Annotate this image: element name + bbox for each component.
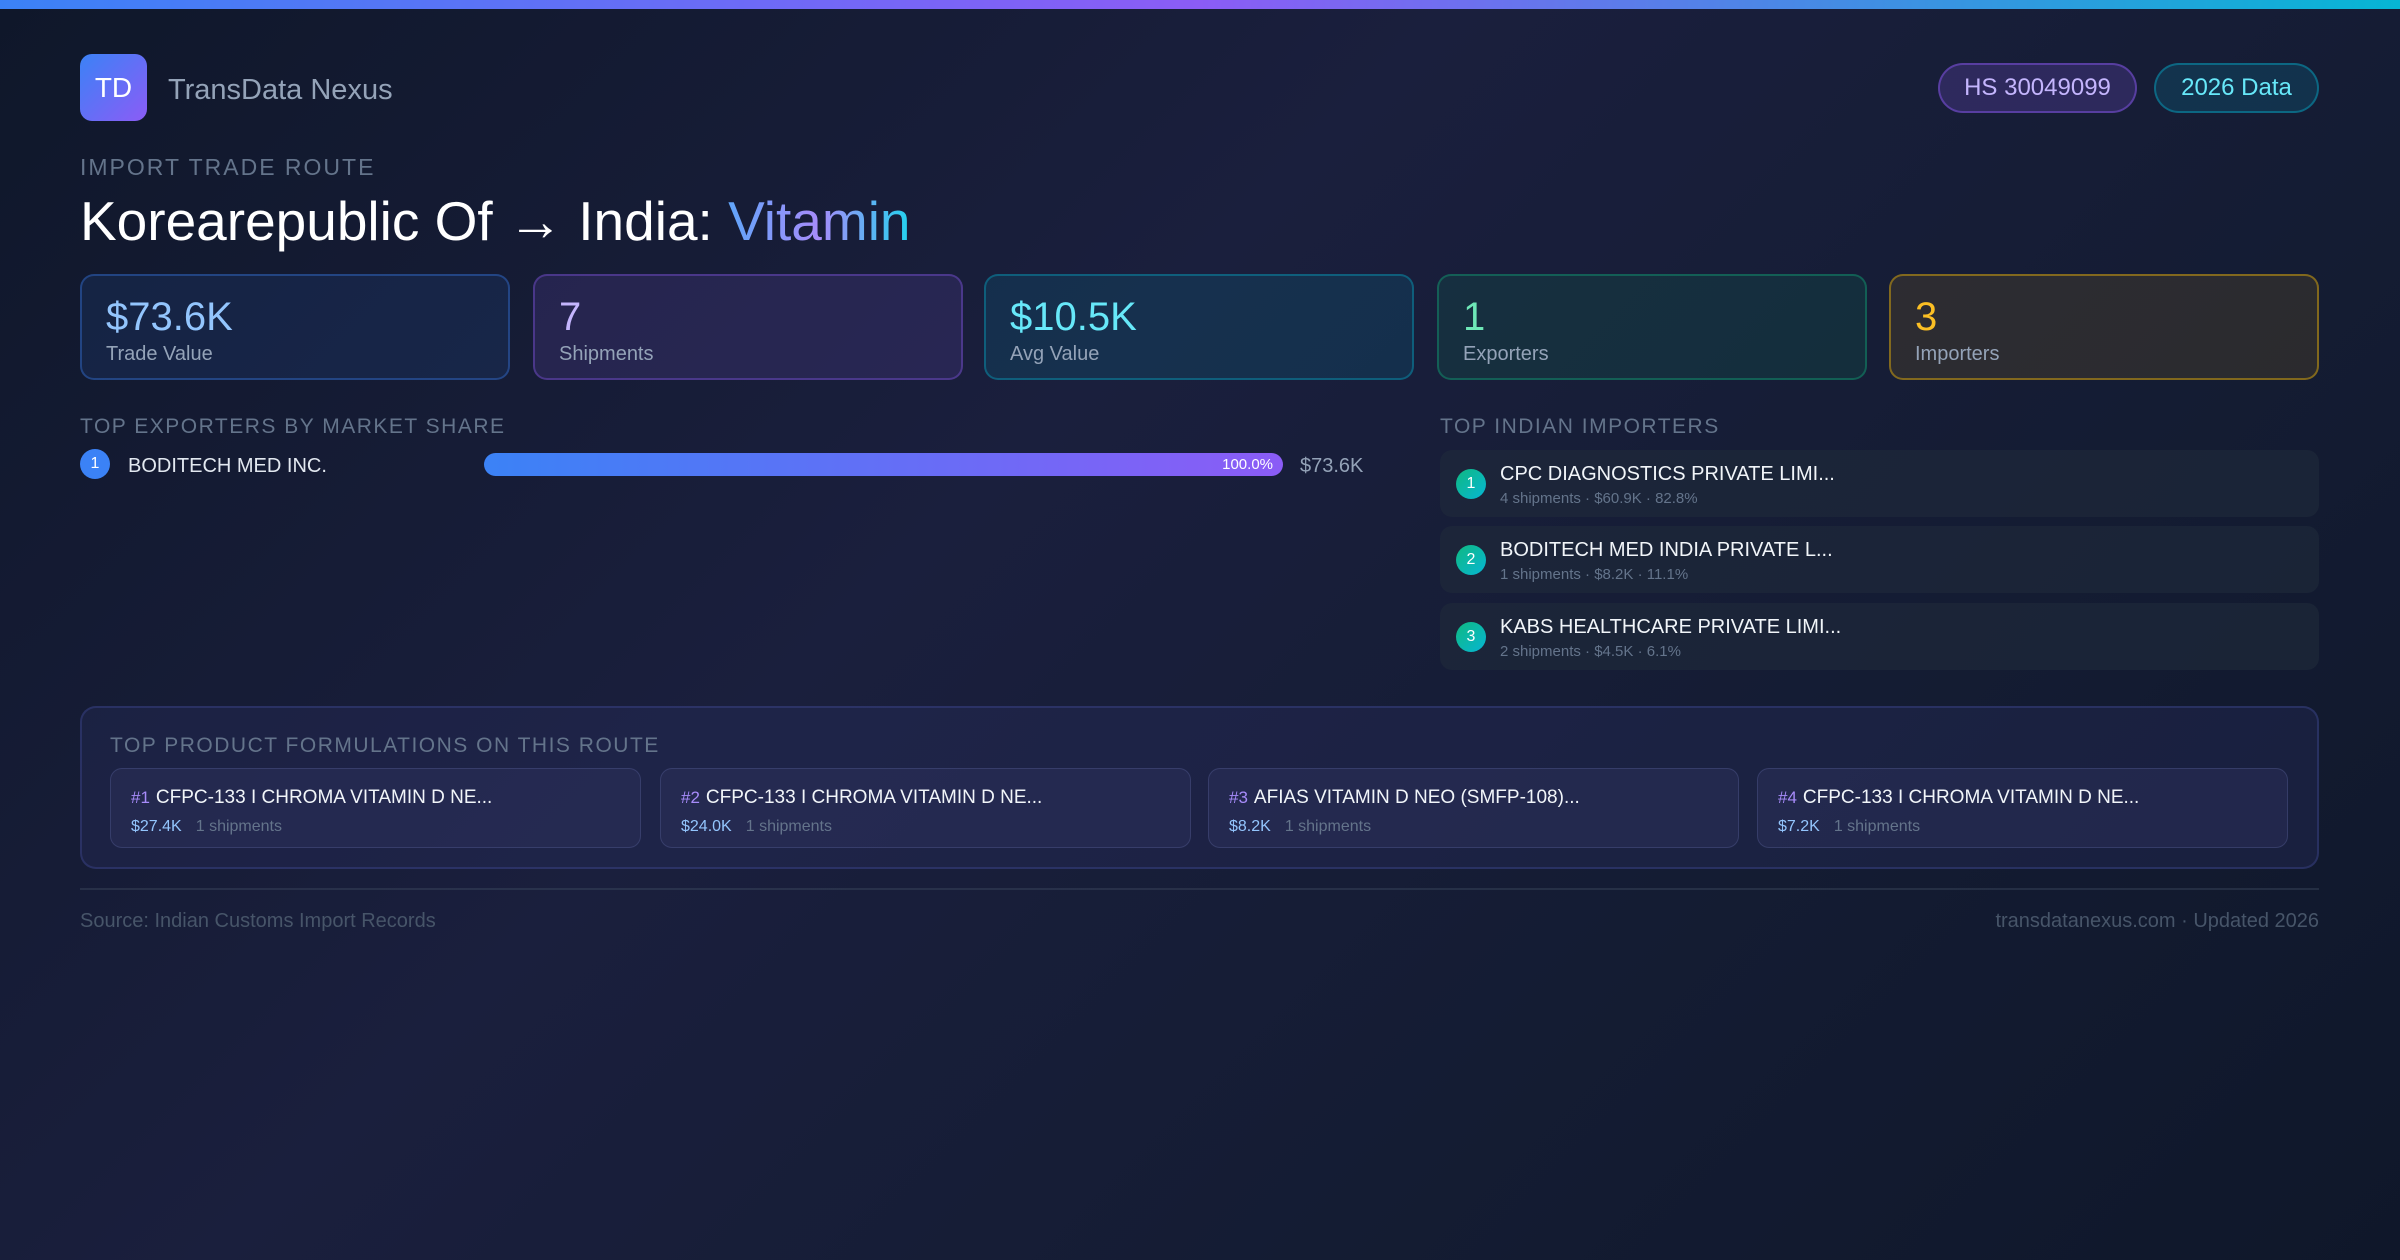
importer 1: 1 (1467, 475, 1475, 492)
exporter row: BODITECH MED INC. (128, 455, 327, 477)
bar: 100.0% (1222, 456, 1273, 473)
formulation 3: $8.2K 1 shipments (1229, 818, 1371, 835)
badge: year (2154, 63, 2319, 113)
stat card: trade value (80, 274, 510, 380)
stat card: avg value (984, 274, 1414, 380)
badge: HS code: HS 30049099 (1964, 74, 2111, 101)
formulation 1: $27.4K 1 shipments (131, 818, 282, 835)
kicker: IMPORT TRADE ROUTE (80, 154, 375, 180)
footer credit: transdatanexus.com · Updated 2026 (1995, 910, 2319, 932)
exporter row: $73.6K (1300, 455, 1363, 477)
formulation 2: #2 CFPC-133 I CHROMA VITAMIN D NE... (681, 787, 1042, 808)
stat card: shipments: 7 (559, 295, 581, 339)
importer 2: 2 (1467, 551, 1475, 568)
importer 2 (1440, 526, 2319, 593)
stat card: trade value: Trade Value (106, 343, 213, 365)
exporter row: 1 (91, 455, 99, 472)
importer 1: CPC DIAGNOSTICS PRIVATE LIMI... (1500, 463, 1835, 485)
exporter row (80, 449, 1363, 479)
importer 1: 4 shipments · $60.9K · 82.8% (1500, 490, 1698, 507)
formulation 1: #1 CFPC-133 I CHROMA VITAMIN D NE... (131, 787, 492, 808)
importer 3: KABS HEALTHCARE PRIVATE LIMI... (1500, 616, 1841, 638)
panel: formulations (80, 706, 2319, 869)
formulation 3 (1208, 768, 1739, 848)
stat card: trade value: $73.6K (106, 295, 233, 339)
logo icon: TD (95, 72, 132, 102)
logo icon (80, 54, 147, 121)
importer 3 (1440, 603, 2319, 670)
stat card: avg value: $10.5K (1010, 295, 1137, 339)
stat card: exporters: 1 (1463, 295, 1485, 339)
badge: HS code (1938, 63, 2137, 113)
importer 2: BODITECH MED INDIA PRIVATE L... (1500, 539, 1833, 561)
formulation 4: $7.2K 1 shipments (1778, 818, 1920, 835)
stat card: importers (1889, 274, 2319, 380)
formulation 2 (660, 768, 1191, 848)
stat card: avg value: Avg Value (1010, 343, 1099, 365)
formulation 2: $24.0K 1 shipments (681, 818, 832, 835)
formulation 1 (110, 768, 641, 848)
stat card: exporters (1437, 274, 1867, 380)
stat card: shipments: Shipments (559, 343, 654, 365)
formulation 4: #4 CFPC-133 I CHROMA VITAMIN D NE... (1778, 787, 2139, 808)
importer 2: 1 shipments · $8.2K · 11.1% (1500, 566, 1688, 583)
bar (484, 453, 1283, 476)
heading: importers: TOP INDIAN IMPORTERS (1440, 415, 1720, 438)
formulation 4 (1757, 768, 2288, 848)
formulation 3: #3 AFIAS VITAMIN D NEO (SMFP-108)... (1229, 787, 1580, 808)
importer 3: 3 (1467, 628, 1475, 645)
heading: formulations: TOP PRODUCT FORMULATIONS ON THIS ROUTE (110, 734, 660, 757)
importer 1 (1440, 450, 2319, 517)
stat card: exporters: Exporters (1463, 343, 1549, 365)
stat card: importers: 3 (1915, 295, 1937, 339)
title: Korearepublic Of → India: Vitamin (80, 190, 911, 252)
heading: exporters: TOP EXPORTERS BY MARKET SHARE (80, 415, 506, 438)
brand name: TransData Nexus (168, 74, 393, 106)
stat card: shipments (533, 274, 963, 380)
importer 3: 2 shipments · $4.5K · 6.1% (1500, 643, 1681, 660)
stat card: importers: Importers (1915, 343, 1999, 365)
badge: year: 2026 Data (2181, 74, 2292, 101)
footer source: Source: Indian Customs Import Records (80, 910, 436, 932)
